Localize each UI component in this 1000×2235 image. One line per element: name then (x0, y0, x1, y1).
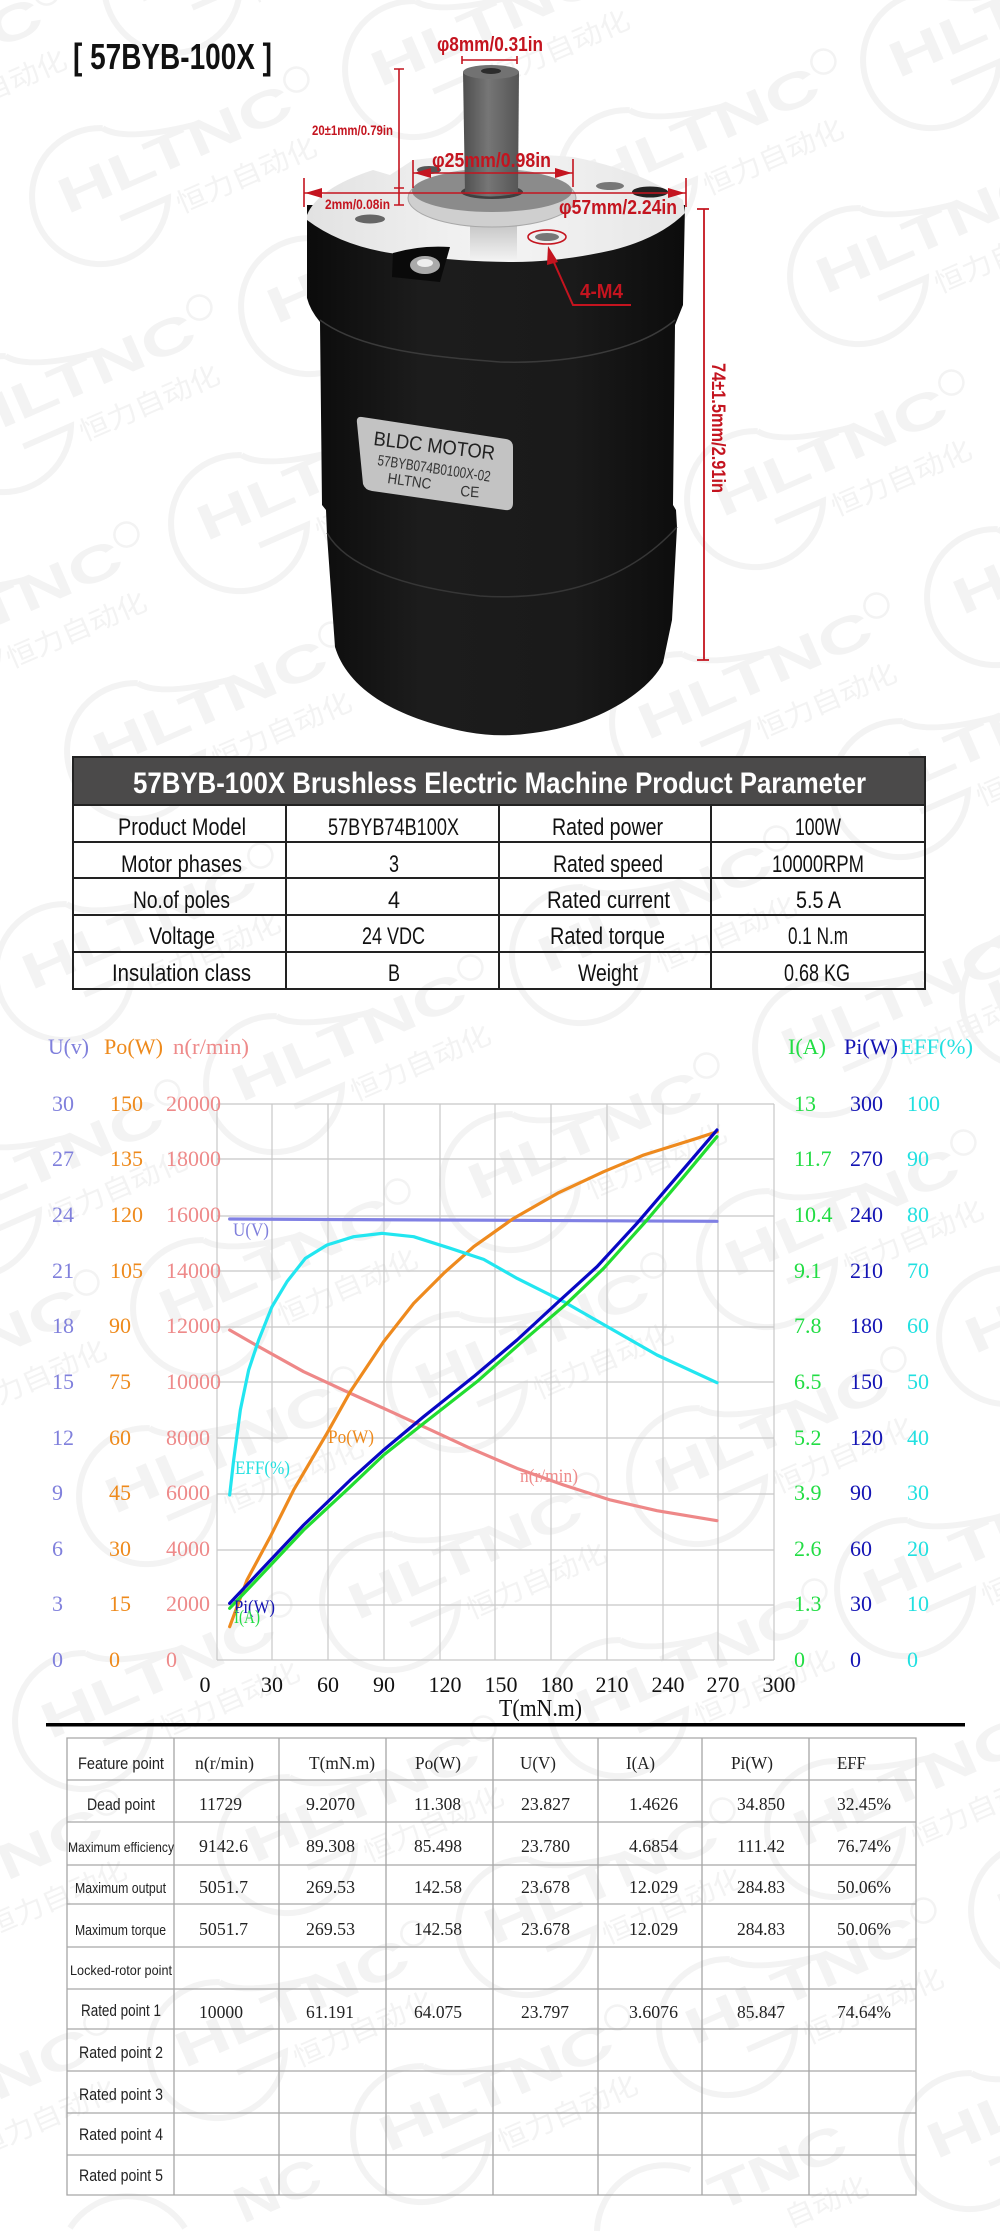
text: HLTNC (166, 1927, 418, 2079)
dimension: body diameter: φ57mm/2.24in (559, 197, 677, 219)
text: HLTNC (475, 1804, 727, 1956)
curve: Po(W) (230, 1132, 717, 1627)
row: maximum torque: Maximum torque (75, 1922, 166, 1939)
axis: Pi(W): 30 (850, 1591, 872, 1616)
section divider rule (46, 1723, 965, 1726)
axis: n(r/min) (166, 1091, 221, 1672)
row: voltage / rated torque: Voltage (149, 923, 215, 950)
text: HLTNC (13, 849, 265, 1001)
text: HLTNC (772, 924, 1000, 1076)
curve: U(V) (230, 1219, 717, 1221)
text: 恒力自动化 (582, 1118, 731, 1205)
axis: EFF(%): 20 (907, 1536, 929, 1561)
axis: U(v): 3 (52, 1591, 63, 1616)
text: 恒力自动化 (289, 1986, 438, 2073)
row: rated point 1: 10000 (199, 2002, 243, 2022)
nameplate label (357, 417, 513, 510)
text: HLTNC (676, 1904, 928, 2056)
axis: Pi(W): 120 (850, 1425, 883, 1450)
axis: Po(W): 120 (110, 1202, 143, 1227)
row: dead point: Dead point (87, 1795, 155, 1814)
row: poles / rated current: No.of poles (133, 887, 230, 914)
row: poles / rated current: Rated current (547, 887, 670, 914)
row: maximum output: 284.83 (737, 1877, 785, 1897)
axis: Po(W): 75 (109, 1369, 131, 1394)
row: maximum torque: 142.58 (414, 1919, 462, 1939)
axis: U(v): 24 (52, 1202, 74, 1227)
axis: U(v): 18 (52, 1313, 74, 1338)
x axis ticks: 60 (317, 1672, 339, 1697)
axis: Pi(W): 270 (850, 1146, 883, 1171)
axis: U(v): 21 (52, 1258, 74, 1283)
axis: Po(W): 150 (110, 1091, 143, 1116)
axis: n(r/min): 8000 (166, 1425, 210, 1450)
axis: n(r/min): 20000 (166, 1091, 221, 1116)
row: locked-rotor point: Locked-rotor point (70, 1962, 172, 1978)
axis: U(v) (52, 1091, 74, 1672)
dimension: body diameter (304, 178, 686, 219)
x axis ticks: 180 (540, 1672, 574, 1697)
dimension annotations (304, 34, 728, 660)
text: 恒力自动化 (273, 1244, 422, 1331)
dimension: shaft diameter (437, 34, 543, 64)
row: dead point: 23.827 (521, 1794, 570, 1814)
text: HLTNC (96, 1373, 348, 1525)
text: 恒力自动化 (529, 1318, 678, 1405)
table header row: T(mN.m) (309, 1753, 375, 1774)
text: 恒力自动化 (43, 1145, 192, 1232)
row: voltage / rated torque: 24 VDC (362, 923, 425, 950)
x axis ticks: 150 (484, 1672, 518, 1697)
axis: U(v): 30 (52, 1091, 74, 1116)
table header row: I(A) (626, 1753, 655, 1774)
row: rated point 1: 3.6076 (629, 2002, 678, 2022)
axis: Po(W): 135 (110, 1146, 143, 1171)
axis: n(r/min): 16000 (166, 1202, 221, 1227)
text: HLTNC (646, 1353, 898, 1505)
row: maximum efficiency: 85.498 (414, 1836, 462, 1856)
row: motor phases / rated speed: 10000RPM (772, 851, 864, 878)
text: HLTNC (370, 2011, 622, 2163)
row: maximum torque: 5051.7 (199, 1919, 248, 1939)
axis: Pi(W): 180 (850, 1313, 883, 1338)
text: 恒力自动化 (699, 114, 848, 201)
text: HLTNC (529, 832, 781, 984)
dimension: boss height (325, 188, 404, 212)
axis: I(A): 6.5 (794, 1369, 822, 1394)
axis: Pi(W): 300 (850, 1091, 883, 1116)
axis: I(A): 9.1 (794, 1258, 822, 1283)
x axis ticks: 270 (706, 1672, 740, 1697)
row: maximum torque (75, 1919, 891, 1939)
text: HLTNC (32, 1598, 284, 1750)
chart: motor performance curves (48, 1034, 973, 1722)
axis: n(r/min): 12000 (166, 1313, 221, 1338)
axis: EFF(%): 60 (907, 1313, 929, 1338)
text: 恒力自动化 (311, 459, 460, 546)
axis: Po(W): 15 (109, 1591, 131, 1616)
curve label: I(A): I(A) (234, 1607, 260, 1628)
row: dead point: 11.308 (414, 1794, 461, 1814)
row: insulation class / weight: B (388, 960, 400, 987)
axis: EFF(%): 90 (907, 1146, 929, 1171)
row: rated point 1: 64.075 (414, 2002, 462, 2022)
x axis ticks: 30 (261, 1672, 283, 1697)
curve: Pi(W) (230, 1130, 717, 1603)
nameplate label: CE (460, 483, 480, 501)
row: maximum output: 142.58 (414, 1877, 462, 1897)
axis: I(A): 11.7 (794, 1146, 832, 1171)
row: maximum torque: 12.029 (629, 1919, 678, 1939)
row: product model / rated power: Product Model (118, 814, 246, 841)
row: poles / rated current: 4 (388, 887, 400, 914)
text: 恒力自动化 (690, 1644, 839, 1731)
chart grid (217, 1104, 774, 1660)
row: dead point: 1.4626 (629, 1794, 678, 1814)
curve label: Po(W): Po(W) (328, 1427, 374, 1448)
curve label: U(V): U(V) (233, 1220, 269, 1241)
title: model name: [ 57BYB-100X ] (73, 36, 272, 77)
lower collar seam (327, 527, 677, 597)
axis: I(A): 1.3 (794, 1591, 822, 1616)
axis: Pi(W): 0 (850, 1647, 861, 1672)
axis headers: I(A) (788, 1034, 826, 1059)
row: maximum output: 269.53 (306, 1877, 355, 1897)
row: maximum torque: 23.678 (521, 1919, 570, 1939)
row: maximum efficiency: Maximum efficiency (68, 1839, 174, 1855)
row: rated point 5: Rated point 5 (79, 2166, 163, 2185)
axis: EFF(%) (907, 1091, 940, 1672)
axis: Po(W): 0 (109, 1647, 120, 1672)
row: maximum efficiency (68, 1836, 891, 1856)
text: 恒力自动化 (2, 587, 151, 674)
text: HLTNC (459, 1059, 711, 1211)
text: 恒力自动化 (462, 1538, 611, 1625)
row: dead point (87, 1794, 891, 1814)
row: rated point 1: 85.847 (737, 2002, 785, 2022)
output shaft (461, 65, 523, 199)
table header row: Feature point (78, 1754, 164, 1773)
axis headers: EFF(%) (900, 1034, 973, 1059)
row: maximum efficiency: 76.74% (837, 1836, 891, 1856)
axis: Po(W): 105 (110, 1258, 143, 1283)
row: rated point 1: 61.191 (306, 2002, 354, 2022)
text: 恒力自动化 (652, 891, 801, 978)
axis: U(v): 27 (52, 1146, 74, 1171)
text: 恒力自动化 (769, 1412, 918, 1499)
row: dead point: 34.850 (737, 1794, 785, 1814)
curve: EFF(%) (230, 1233, 717, 1495)
row: maximum torque: 284.83 (737, 1919, 785, 1939)
table header: 57BYB-100X Brushless Electric Machine Product Parameter (133, 767, 866, 800)
axis: I(A): 10.4 (794, 1202, 832, 1227)
x axis ticks: 210 (596, 1672, 628, 1697)
axis: n(r/min): 0 (166, 1647, 177, 1672)
text: 恒力自动化 (172, 132, 321, 219)
axis: Pi(W): 240 (850, 1202, 883, 1227)
curve label: n(r/min): n(r/min) (520, 1466, 578, 1487)
axis: U(v): 15 (52, 1369, 74, 1394)
row: dead point: 32.45% (837, 1794, 891, 1814)
text: HLTNC (258, 183, 510, 335)
x axis title: T(mN.m) (499, 1696, 582, 1722)
row: maximum torque: 269.53 (306, 1919, 355, 1939)
axis: n(r/min): 6000 (166, 1480, 210, 1505)
axis: I(A): 0 (794, 1647, 805, 1672)
table header row: n(r/min) (195, 1753, 254, 1774)
axis: U(v): 12 (52, 1425, 74, 1450)
axis: Po(W): 90 (109, 1313, 131, 1338)
row: rated point 4: Rated point 4 (79, 2125, 163, 2144)
table header row: Pi(W) (731, 1753, 773, 1774)
row: maximum output (75, 1877, 891, 1897)
illustration: brushless motor (307, 65, 685, 735)
row: poles / rated current (133, 887, 841, 914)
row: insulation class / weight: Insulation class (112, 960, 251, 987)
axis: EFF(%): 100 (907, 1091, 940, 1116)
text: HLTNC (150, 1185, 402, 1337)
axis: I(A): 7.8 (794, 1313, 822, 1338)
row: insulation class / weight: Weight (578, 960, 638, 987)
row: maximum output: Maximum output (75, 1880, 167, 1897)
row: product model / rated power: 100W (795, 814, 841, 841)
dimension: boss height: 2mm/0.08in (325, 196, 390, 212)
row: voltage / rated torque: 0.1 N.m (788, 923, 848, 950)
text: HLTNC (567, 1585, 819, 1737)
text: 恒力自动化 (839, 1195, 988, 1282)
ground screw (392, 247, 450, 282)
row: maximum efficiency: 9142.6 (199, 1836, 248, 1856)
row: maximum efficiency: 89.308 (306, 1836, 355, 1856)
x axis ticks: 0 (200, 1672, 210, 1697)
text: 恒力自动化 (485, 5, 634, 92)
text: HLTNC (236, 1722, 488, 1874)
axis headers: Po(W) (104, 1034, 163, 1059)
x axis ticks: 300 (762, 1672, 796, 1697)
row: motor phases / rated speed: Motor phases (121, 851, 242, 878)
text: 恒力自动化 (381, 242, 530, 329)
axis: EFF(%): 40 (907, 1425, 929, 1450)
text: HLTNC (223, 961, 475, 1113)
table header row: EFF (837, 1753, 866, 1773)
nameplate label: BLDC MOTOR (372, 428, 496, 465)
text: 恒力自动化 (799, 1963, 948, 2050)
text: 恒力自动化 (155, 1657, 304, 1744)
dimension: shaft diameter: φ8mm/0.31in (437, 34, 543, 56)
text: HLTNC (629, 599, 881, 751)
axis: EFF(%): 0 (907, 1647, 918, 1672)
row: poles / rated current: 5.5 A (796, 887, 841, 914)
row: product model / rated power (118, 814, 841, 841)
axis: I(A): 5.2 (794, 1425, 822, 1450)
axis: n(r/min): 10000 (166, 1369, 221, 1394)
text: NC (225, 2147, 330, 2234)
text: 恒力自动化 (752, 658, 901, 745)
axis: n(r/min): 4000 (166, 1536, 210, 1561)
text: HLTNC (807, 153, 1000, 305)
text: HLTNC (339, 1479, 591, 1631)
axis: U(v): 0 (52, 1647, 63, 1672)
text: 恒力自动化 (75, 360, 224, 447)
axis: Po(W) (109, 1091, 143, 1672)
axis: EFF(%): 50 (907, 1369, 929, 1394)
axis: EFF(%): 30 (907, 1480, 929, 1505)
axis: n(r/min): 18000 (166, 1146, 221, 1171)
nameplate label: HLTNC (386, 470, 433, 493)
text: 恒力自动化 (136, 908, 285, 995)
motor body (307, 205, 685, 735)
text: HLTNC (49, 73, 301, 225)
dimension: shaft length: 20±1mm/0.79in (312, 122, 393, 138)
row: insulation class / weight: 0.68 KG (784, 960, 850, 987)
text: HLTNC (406, 1259, 658, 1411)
row: rated point 3: Rated point 3 (79, 2085, 163, 2104)
row: product model / rated power: Rated power (552, 814, 663, 841)
panel: feature point table (67, 1738, 916, 2195)
text: HLTNC (784, 1706, 1000, 1858)
text: HLTNC (716, 1136, 968, 1288)
text: HLTNC (704, 376, 956, 528)
x axis ticks: 120 (428, 1672, 462, 1697)
row: maximum output: 12.029 (629, 1877, 678, 1897)
axis headers: Pi(W) (844, 1034, 898, 1059)
row: motor phases / rated speed: Rated speed (553, 851, 663, 878)
axis: U(v): 9 (52, 1480, 63, 1505)
brushed streak on face (470, 226, 517, 260)
row: insulation class / weight (112, 960, 850, 987)
axis: I(A): 13 (794, 1091, 816, 1116)
x axis ticks: 90 (373, 1672, 395, 1697)
axis: Po(W): 45 (109, 1480, 131, 1505)
axis: n(r/min): 14000 (166, 1258, 221, 1283)
text: 恒力自动化 (346, 1020, 495, 1107)
row: rated point 1: 23.797 (521, 2002, 569, 2022)
text: 恒力自动化 (827, 435, 976, 522)
axis headers: n(r/min) (173, 1034, 249, 1059)
curves (230, 1130, 717, 1627)
row: maximum efficiency: 111.42 (737, 1836, 785, 1856)
mounting holes (355, 166, 668, 241)
upper collar seam (320, 320, 675, 362)
row: dead point: 11729 (199, 1794, 242, 1814)
row: rated point 1 (81, 2001, 891, 2022)
row: motor phases / rated speed: 3 (389, 851, 399, 878)
row: rated point 1: Rated point 1 (81, 2001, 161, 2020)
nameplate label: 57BYB074B0100X-02 (376, 452, 492, 486)
motor end face (307, 154, 685, 262)
text: 恒力自动化 (207, 687, 356, 774)
axis: n(r/min): 2000 (166, 1591, 210, 1616)
text: 恒力自动化 (359, 1781, 508, 1868)
curve: I(A) (230, 1137, 717, 1608)
axis: Pi(W): 210 (850, 1258, 883, 1283)
axis: I(A): 3.9 (794, 1480, 822, 1505)
row: product model / rated power: 57BYB74B100X (328, 814, 459, 841)
row: rated point 2: Rated point 2 (79, 2043, 163, 2062)
row: rated point 1: 74.64% (837, 2002, 891, 2022)
axis: I(A): 2.6 (794, 1536, 822, 1561)
text: HLTNC (188, 400, 440, 552)
axis: U(v): 6 (52, 1536, 63, 1561)
axis: Po(W): 60 (109, 1425, 131, 1450)
text: 恒力自动化 (493, 2070, 642, 2157)
row: maximum efficiency: 4.6854 (629, 1836, 678, 1856)
callout: 4-M4 thread: 4-M4 (580, 281, 624, 303)
dimension: boss diameter: φ25mm/0.98in (432, 150, 551, 172)
table header row: U(V) (520, 1753, 556, 1774)
table header row: Po(W) (415, 1753, 461, 1774)
row: dead point: 9.2070 (306, 1794, 355, 1814)
dimension: boss diameter (413, 150, 573, 188)
x axis ticks: 240 (652, 1672, 684, 1697)
row: voltage / rated torque (149, 923, 848, 950)
text: 恒力自动化 (219, 1432, 368, 1519)
row: maximum efficiency: 23.780 (521, 1836, 570, 1856)
row: maximum torque: 50.06% (837, 1919, 891, 1939)
axis headers (48, 1034, 973, 1059)
text: 恒力自动化 (598, 1863, 747, 1950)
text: HLTNC (576, 55, 828, 207)
axis: EFF(%): 10 (907, 1591, 929, 1616)
curve label: EFF(%): EFF(%) (235, 1458, 290, 1479)
text: TNC (700, 2113, 855, 2222)
row: motor phases / rated speed (121, 851, 864, 878)
axis: Pi(W): 60 (850, 1536, 872, 1561)
curve label: Pi(W): Pi(W) (234, 1597, 275, 1618)
row: maximum output: 23.678 (521, 1877, 570, 1897)
table header row (78, 1753, 866, 1774)
flange boss (408, 169, 576, 227)
callout: 4-M4 thread (528, 230, 631, 305)
row: voltage / rated torque: Rated torque (550, 923, 665, 950)
dimension: body length (697, 209, 728, 660)
axis: Pi(W): 90 (850, 1480, 872, 1505)
axis: EFF(%): 70 (907, 1258, 929, 1283)
curve: n(r/min) (230, 1330, 717, 1521)
axis: Pi(W): 150 (850, 1369, 883, 1394)
axis: I(A) (794, 1091, 832, 1672)
dimension: body length: 74±1.5mm/2.91in (707, 363, 728, 493)
text: 自动化 (780, 2171, 873, 2233)
axis: EFF(%): 80 (907, 1202, 929, 1227)
x axis ticks (200, 1672, 796, 1697)
table header (73, 757, 925, 805)
row: maximum output: 5051.7 (199, 1877, 248, 1897)
row: maximum output: 50.06% (837, 1877, 891, 1897)
axis headers: U(v) (48, 1034, 89, 1059)
axis: Pi(W) (850, 1091, 883, 1672)
text: HLTNC (84, 628, 336, 780)
axis: Po(W): 30 (109, 1536, 131, 1561)
dimension: shaft length (312, 69, 404, 188)
panel: product parameter table (73, 757, 925, 989)
